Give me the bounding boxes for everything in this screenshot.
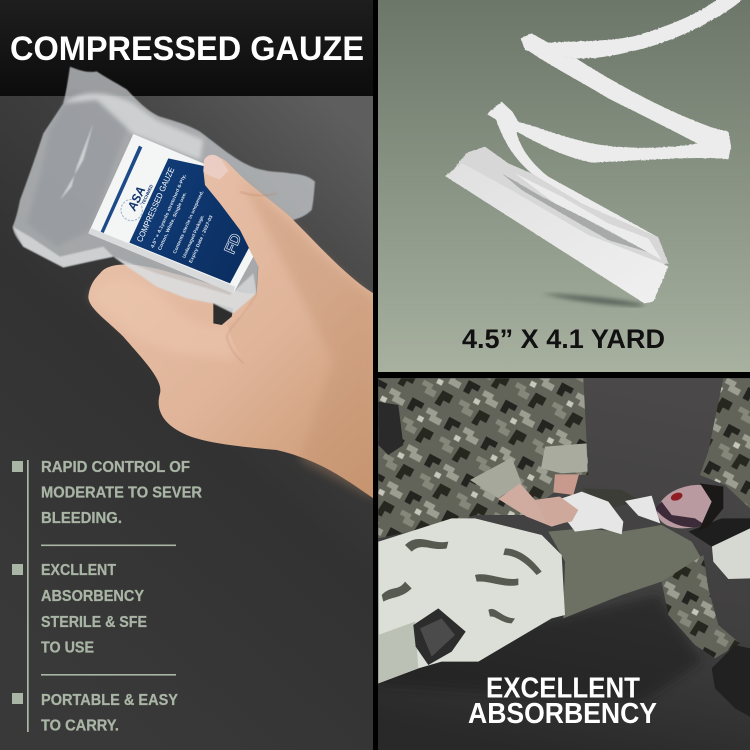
gauze at neck	[625, 496, 660, 523]
block fold dark	[502, 173, 652, 253]
thumb shading	[248, 189, 372, 499]
card details: Contents sterile in unopened,	[172, 190, 204, 254]
medic right knee	[712, 525, 750, 579]
benefit 2 text: STERILE & SFE	[41, 614, 147, 631]
medic right sleeve	[541, 443, 587, 473]
gauze card	[88, 134, 257, 293]
medic right	[688, 378, 750, 579]
benefit 1 text	[41, 459, 202, 527]
casualty left arm	[662, 555, 740, 658]
medic left	[378, 378, 588, 538]
casualty	[378, 478, 750, 717]
plastic packet	[13, 67, 315, 313]
card details	[150, 174, 214, 264]
packet body	[13, 67, 315, 313]
card logo	[129, 184, 152, 212]
benefit 1	[12, 459, 202, 527]
benefit 3 text: TO CARRY.	[41, 718, 119, 734]
medic body	[378, 378, 588, 538]
benefit 3	[12, 692, 179, 734]
mouth	[670, 491, 684, 502]
lower flap	[113, 257, 257, 313]
card details: 4.5" × 4.1yards stretched 6-Ply,	[150, 174, 187, 249]
panel background	[378, 0, 750, 372]
bullet	[12, 693, 23, 704]
medic left sleeve	[470, 458, 522, 498]
gauze shadow	[542, 293, 646, 307]
block fold light	[515, 173, 662, 260]
benefit 1 text: MODERATE TO SEVER	[41, 484, 202, 502]
benefits list	[12, 459, 202, 734]
casualty torso	[548, 525, 703, 618]
medic hand	[498, 484, 566, 527]
trousers base	[378, 518, 565, 683]
card heading: COMPRESSED GAUZE	[134, 165, 176, 243]
hand palm and fingers	[88, 265, 373, 498]
logo globe	[121, 199, 142, 221]
medic glove	[688, 518, 750, 547]
caption: ABSORBENCY	[468, 698, 657, 730]
medic right body	[700, 378, 750, 508]
knee pad inner	[420, 618, 455, 657]
medic fingers	[535, 497, 578, 525]
hand shading	[86, 289, 236, 356]
camo patches	[382, 539, 542, 623]
medic holster	[378, 402, 403, 455]
benefit 3 text: PORTABLE & EASY	[41, 692, 179, 709]
packet highlight band	[63, 93, 203, 160]
benefit 2 text: EXCLLENT	[41, 562, 116, 579]
benefit 2 text: TO USE	[41, 640, 94, 656]
thumb	[203, 158, 373, 346]
panel background	[0, 0, 373, 750]
card details: Cotton, White. Single use.	[157, 191, 187, 251]
benefit 2	[12, 562, 147, 656]
thumb fold	[227, 293, 257, 363]
benefit 3 text	[41, 692, 179, 734]
panel: gauze size	[378, 0, 750, 372]
caption	[468, 672, 657, 730]
card blue stripe	[101, 146, 142, 233]
photo: medic applying gauze to soldier	[378, 378, 750, 717]
benefit 1 text: RAPID CONTROL OF	[41, 459, 190, 476]
benefit 1 text: BLEEDING.	[41, 510, 122, 527]
logo text: ASA	[125, 184, 148, 214]
benefit 2 text	[41, 562, 147, 656]
compressed block	[445, 147, 668, 303]
ground shadow	[378, 595, 702, 702]
thumb crease	[240, 192, 277, 196]
casualty upper arm behind	[582, 488, 642, 508]
casualty trousers	[378, 518, 565, 683]
applied gauze	[560, 492, 660, 534]
vertical line	[27, 460, 29, 732]
hanging band	[496, 118, 658, 247]
trousers shaded lower leg	[378, 622, 418, 683]
thumbnail	[203, 155, 228, 179]
panel: field use	[378, 378, 750, 750]
logo sub text: TECHMED	[140, 184, 154, 205]
head	[652, 478, 728, 535]
card side shade	[88, 228, 235, 293]
hair	[698, 483, 723, 532]
benefit 2 text: ABSORBENCY	[41, 588, 145, 605]
card details: Undamaged Package.	[181, 214, 205, 259]
card blue label	[129, 158, 257, 283]
block top layers	[453, 147, 668, 267]
beard and blood	[655, 502, 705, 527]
panel background	[378, 378, 750, 750]
photo: hand holding gauze packet	[13, 67, 373, 498]
panel: product and benefits	[0, 0, 373, 750]
card details: Expiry Date : 2027-03	[188, 214, 214, 264]
block front face	[445, 163, 668, 303]
card FD mark: FD	[221, 231, 245, 257]
gauze ribbon	[487, 0, 746, 247]
photo: unrolled gauze	[445, 0, 746, 307]
medic forearm	[553, 474, 579, 495]
packet fold light	[60, 123, 93, 200]
bullet	[12, 461, 23, 472]
gauze on wound	[560, 492, 623, 534]
divider	[41, 544, 176, 546]
packet edge light	[13, 227, 113, 267]
size label: 4.5” X 4.1 YARD	[462, 324, 665, 354]
top band	[521, 0, 746, 59]
gap between fingers and thumb	[213, 303, 233, 325]
divider	[41, 674, 176, 676]
lower band	[487, 102, 731, 163]
packet fold dark	[30, 96, 125, 244]
knee pad	[413, 608, 466, 665]
bullet	[12, 564, 23, 575]
title: COMPRESSED GAUZE	[10, 30, 364, 68]
card white box	[88, 134, 253, 293]
caption: EXCELLENT	[486, 672, 640, 704]
helmet	[712, 645, 750, 717]
title band	[0, 0, 373, 96]
diagonal band	[525, 48, 731, 147]
